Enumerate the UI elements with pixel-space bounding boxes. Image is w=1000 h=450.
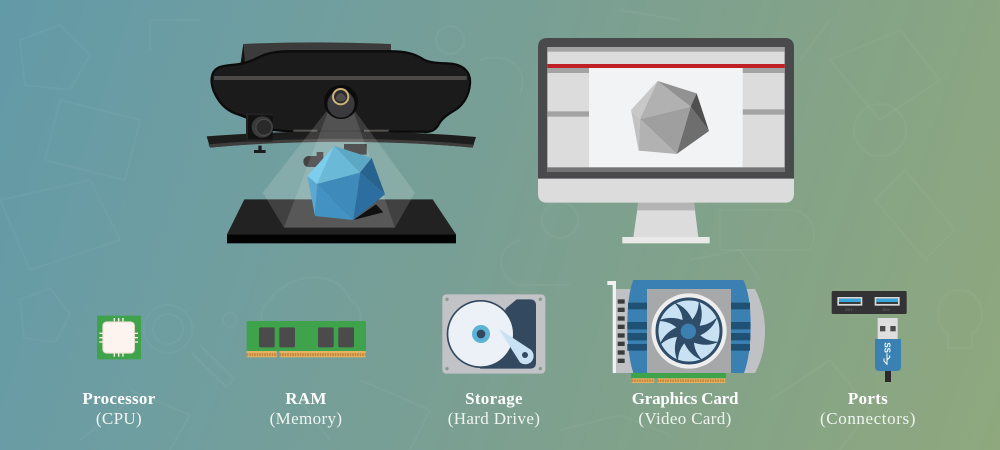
- icon: hard drive: [442, 294, 545, 374]
- icon: USB ports and connector: SS: [882, 342, 891, 354]
- label: graphics card: [632, 389, 738, 428]
- monitor chin: [538, 178, 794, 203]
- turntable platform: [227, 199, 456, 243]
- monitor stand: [633, 202, 698, 237]
- icon: USB ports and connector: [832, 291, 907, 382]
- icon: USB ports and connector: SS⇠: [845, 307, 854, 312]
- label: graphics card: Graphics Card: [632, 389, 738, 408]
- grey 3D model: [631, 81, 709, 154]
- object shadow: [353, 204, 383, 220]
- projected light cone: [263, 111, 415, 228]
- icon: USB ports and connector: SS⇠: [882, 307, 892, 312]
- label: storage: [448, 389, 540, 428]
- icon: processor chip: [97, 316, 141, 359]
- scanner stand arm: [207, 131, 476, 148]
- monitor bezel: [538, 38, 794, 179]
- label: ports: Ports: [848, 389, 888, 408]
- label: RAM: RAM: [285, 389, 327, 408]
- label: ports: (Connectors): [820, 409, 916, 428]
- scanner rear bar: [241, 42, 391, 63]
- label: processor: (CPU): [96, 409, 142, 428]
- label: storage: (Hard Drive): [448, 409, 540, 428]
- screen: [547, 47, 785, 172]
- icon: graphics card: [607, 280, 765, 383]
- label: RAM: [270, 389, 342, 428]
- label: ports: [820, 389, 916, 428]
- label: storage: Storage: [465, 389, 523, 408]
- stand screw: [254, 146, 266, 153]
- label: RAM: (Memory): [270, 409, 342, 428]
- scanner body: [212, 51, 470, 132]
- blue icosahedron: [307, 146, 385, 220]
- label: processor: [82, 389, 156, 428]
- scanner lens: [324, 85, 358, 119]
- icon: RAM module: [247, 321, 366, 357]
- rear mount behind object: [303, 152, 323, 167]
- colour camera: [246, 113, 273, 142]
- label: graphics card: (Video Card): [638, 409, 732, 428]
- label: processor: Processor: [82, 389, 156, 408]
